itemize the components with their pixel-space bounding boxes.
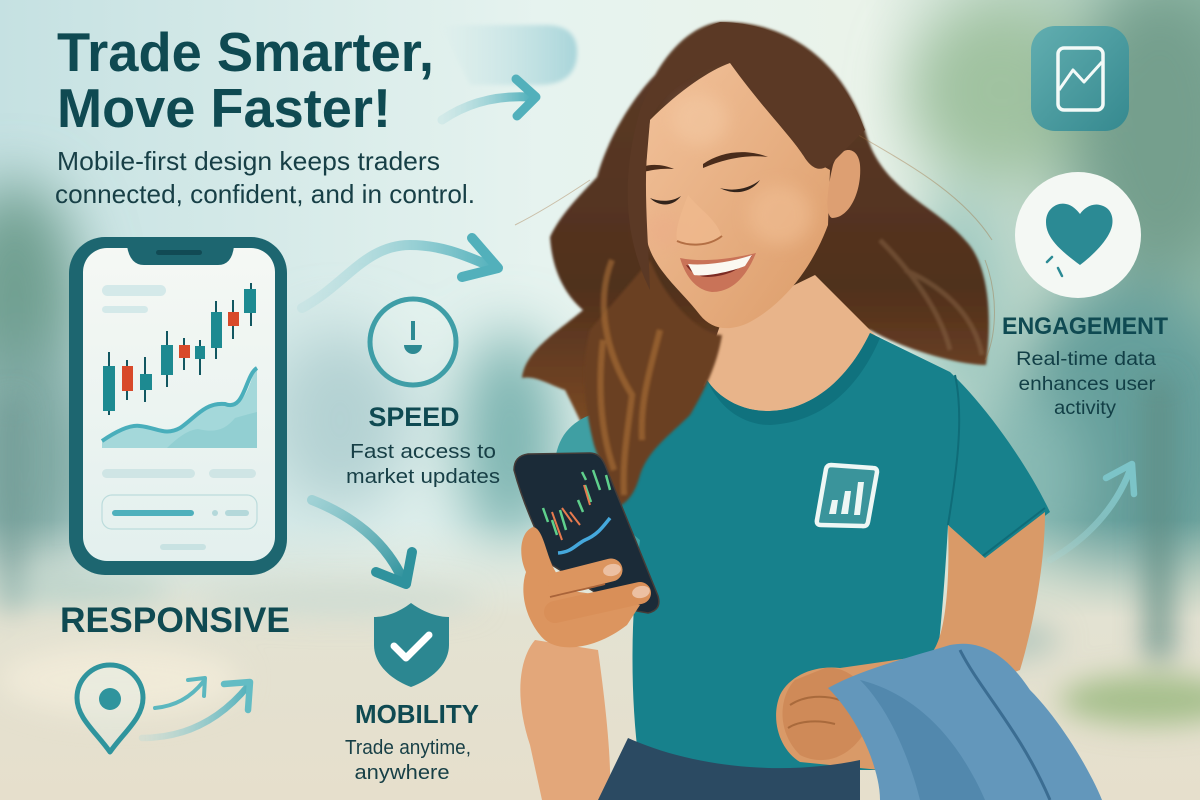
subtitle text block xyxy=(55,146,475,209)
subtitle text block: Mobile-first design keeps traders xyxy=(57,146,440,176)
left arm xyxy=(520,640,610,800)
speed text: Fast access to xyxy=(350,441,496,463)
left sleeve xyxy=(555,415,640,560)
jeans xyxy=(598,738,860,800)
icon: heart in circle xyxy=(1015,172,1141,298)
icon: app tile with phone chart xyxy=(1031,26,1129,131)
engagement text: Real-time data xyxy=(1016,348,1156,370)
front hair over shoulder xyxy=(584,260,722,506)
arrow: phone to mobility xyxy=(312,500,412,584)
denim jacket xyxy=(828,644,1102,800)
title: Trade Smarter, xyxy=(57,21,434,83)
arrow: engagement upward xyxy=(1050,464,1134,560)
woman with phone xyxy=(514,22,1102,800)
eyebrows xyxy=(703,152,768,168)
icon: location pin xyxy=(77,665,143,752)
phone mockup with trading chart xyxy=(69,237,287,575)
front hair lock xyxy=(628,22,865,290)
responsive heading: RESPONSIVE xyxy=(60,601,290,640)
hand holding phone xyxy=(521,527,651,647)
engagement text: activity xyxy=(1054,397,1116,419)
title: Move Faster! xyxy=(57,77,391,139)
ear xyxy=(827,150,860,218)
subtitle text block: connected, confident, and in control. xyxy=(55,179,475,209)
held phone xyxy=(514,453,659,613)
mobility text: MOBILITY xyxy=(355,699,479,729)
arrow: phone to woman xyxy=(302,238,498,308)
title xyxy=(57,21,434,139)
t-shirt xyxy=(607,333,1050,770)
icon: shield with check xyxy=(374,603,449,687)
nose xyxy=(677,195,722,244)
icon: speed gauge xyxy=(370,299,456,385)
engagement text: ENGAGEMENT xyxy=(1002,313,1168,340)
area chart xyxy=(102,368,257,448)
t-shirt logo xyxy=(817,465,877,526)
speed text xyxy=(346,402,500,488)
speed text: SPEED xyxy=(368,402,460,432)
face xyxy=(642,63,860,328)
mouth xyxy=(680,253,756,292)
arrow: title to woman xyxy=(442,79,536,120)
mobility text: Trade anytime, xyxy=(345,737,471,759)
mobility text: anywhere xyxy=(354,762,450,784)
engagement text: enhances user xyxy=(1018,373,1156,395)
neck xyxy=(700,275,878,414)
engagement text xyxy=(1002,313,1168,419)
arrows: responsive motion xyxy=(142,678,250,738)
mobility text xyxy=(345,699,479,784)
speed text: market updates xyxy=(346,466,500,488)
candlestick chart xyxy=(103,283,256,415)
hair back xyxy=(515,22,994,505)
eyes xyxy=(650,196,681,204)
right arm and fist xyxy=(776,512,1045,770)
